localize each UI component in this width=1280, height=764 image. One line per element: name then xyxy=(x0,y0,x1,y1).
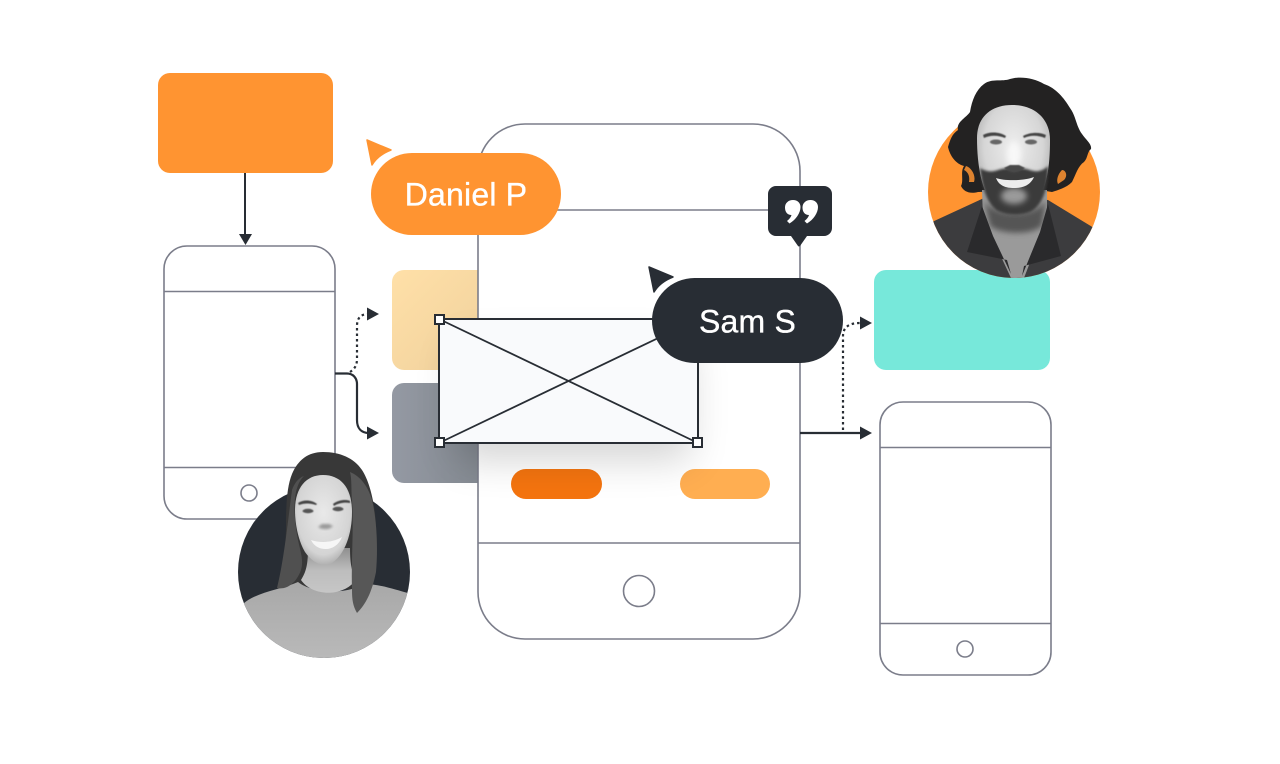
label: Sam S xyxy=(652,278,843,363)
hair back xyxy=(277,452,377,590)
hair outer curls xyxy=(948,78,1091,193)
arrow: orange block to left phone xyxy=(239,173,252,245)
cursor: Daniel P xyxy=(367,140,391,165)
eyes xyxy=(302,509,314,513)
right phone wireframe xyxy=(880,402,1051,675)
hair curl gaps xyxy=(964,166,1066,184)
collar xyxy=(967,204,1061,276)
sweater xyxy=(244,582,408,658)
light orange button xyxy=(680,469,770,499)
eyes xyxy=(990,140,1002,144)
nose xyxy=(1007,142,1021,168)
connector arrows from left phone xyxy=(335,308,379,440)
portrait: man with curly hair xyxy=(928,78,1100,278)
nose shadow xyxy=(318,524,333,529)
label: Daniel P: Daniel P xyxy=(405,176,527,212)
label: Sam S: Sam S xyxy=(699,304,796,340)
eyebrows xyxy=(298,500,350,506)
left hair lock xyxy=(277,476,304,588)
comment bubble with quote mark xyxy=(768,186,832,246)
image placeholder shadow xyxy=(455,345,690,460)
right hair lock xyxy=(350,472,377,613)
neck xyxy=(982,190,1047,278)
dark orange button xyxy=(511,469,602,499)
orange block top left xyxy=(158,73,333,173)
shirt xyxy=(933,198,1092,278)
face xyxy=(295,475,352,565)
left phone wireframe xyxy=(164,246,335,519)
smile xyxy=(996,177,1034,188)
grey card xyxy=(392,383,492,483)
central phone wireframe xyxy=(478,124,800,639)
smile xyxy=(311,537,342,549)
portrait: smiling woman xyxy=(238,452,410,658)
chin highlight xyxy=(1001,188,1027,204)
cursor: Sam S xyxy=(649,267,673,292)
teal card xyxy=(874,270,1050,370)
beard xyxy=(980,166,1048,215)
label: Daniel P xyxy=(371,153,561,235)
neck shadow xyxy=(984,200,1046,233)
face xyxy=(977,105,1050,212)
eyebrows xyxy=(983,132,1046,138)
connector arrows from central phone xyxy=(800,316,872,440)
image placeholder with selection handles xyxy=(435,315,702,447)
pale orange card xyxy=(392,270,492,370)
neck xyxy=(301,548,356,593)
